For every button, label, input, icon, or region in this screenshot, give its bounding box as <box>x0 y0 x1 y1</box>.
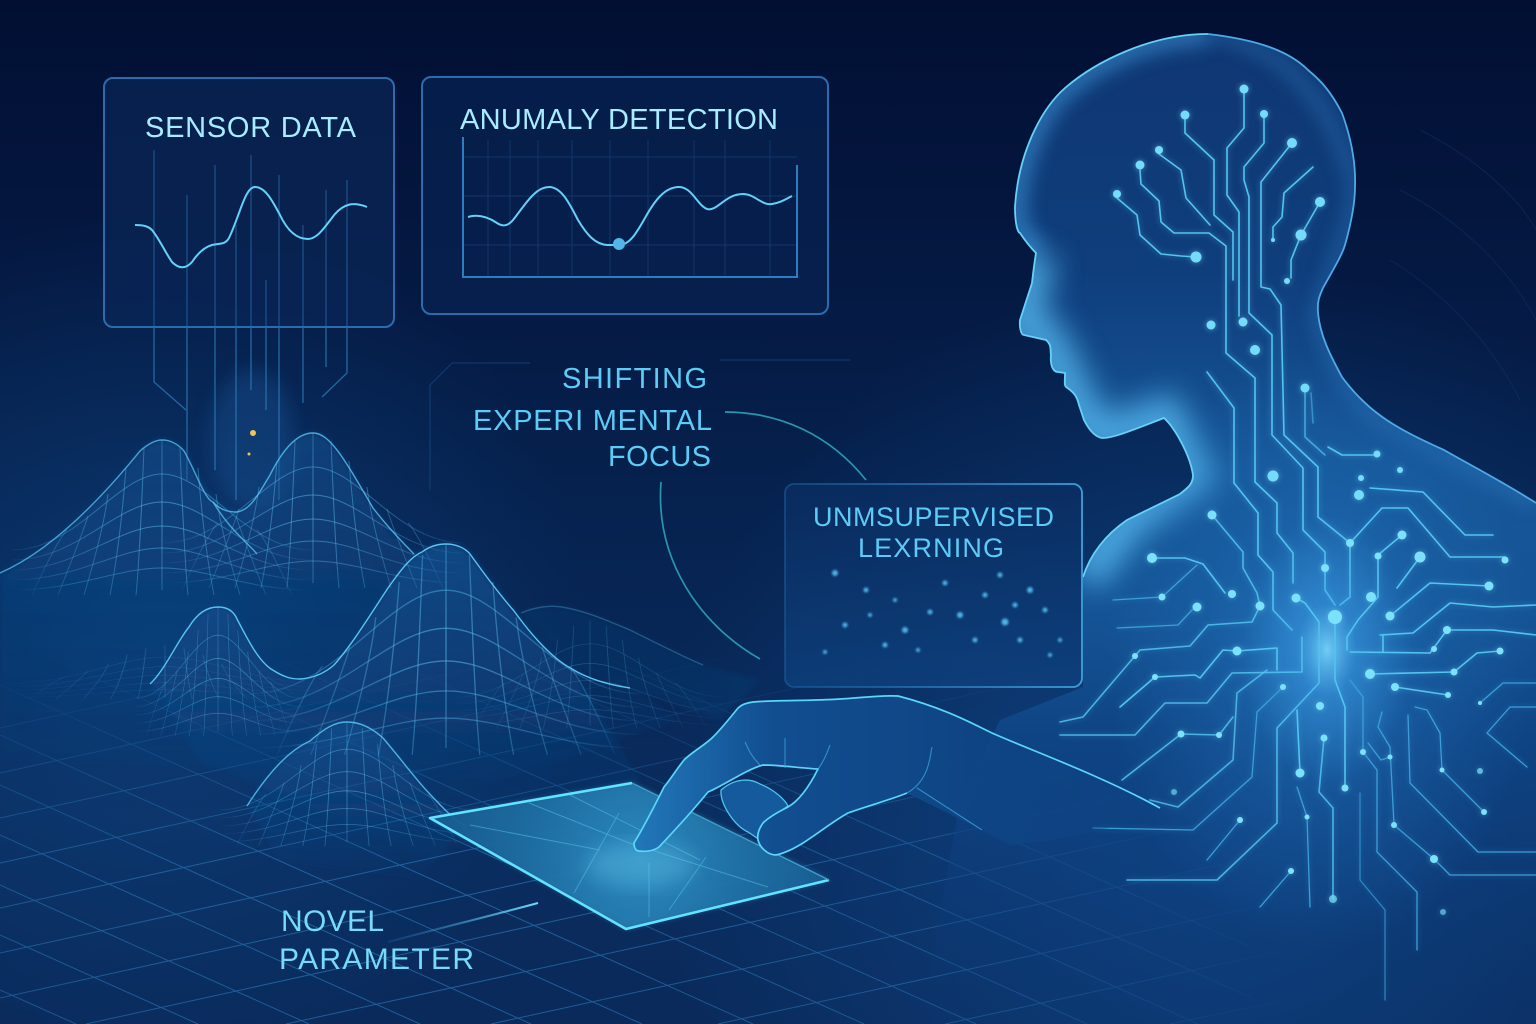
chart: sensor waveform <box>135 187 367 267</box>
circuit traces: brain and spine <box>1113 84 1403 630</box>
figure: human head and shoulders <box>946 33 1536 912</box>
faint bracket lines <box>430 360 850 490</box>
heading: sensor data: SENSOR DATA <box>145 112 357 144</box>
heading: unsupervised learning: UNMSUPERVISED <box>813 502 1054 532</box>
text: shifting experimental focus: EXPERI MENTAL <box>473 405 712 437</box>
core glow <box>1242 515 1412 785</box>
chest nodes <box>1132 510 1508 915</box>
brain nodes <box>1113 84 1403 500</box>
chart: anomaly waveform <box>468 187 792 245</box>
text: shifting experimental focus: SHIFTING <box>562 363 707 395</box>
terrain: wireframe landscape <box>0 432 1230 1024</box>
panel: anomaly detection <box>422 77 828 314</box>
text: shifting experimental focus: FOCUS <box>608 441 711 473</box>
chart frame <box>463 137 797 277</box>
text: shifting experimental focus <box>473 363 712 473</box>
panel: unsupervised learning <box>785 484 1082 687</box>
callout: novel parameter <box>279 903 538 976</box>
hill fills <box>0 433 760 880</box>
panel: sensor data <box>104 78 394 328</box>
hill mesh <box>8 433 725 846</box>
tablet: glowing panel <box>430 783 829 929</box>
middle finger <box>721 780 788 838</box>
circuit traces: chest <box>1060 488 1536 1000</box>
connector lines from sensor panel to terrain <box>154 328 347 510</box>
hill ridges <box>0 433 703 826</box>
heading: anomaly detection: ANUMALY DETECTION <box>460 104 778 136</box>
arrows: curved connectors <box>660 412 866 659</box>
scatter points <box>823 570 1062 657</box>
callout: novel parameter: NOVEL <box>281 905 384 938</box>
palm and pointing finger <box>634 696 1160 855</box>
callout: novel parameter: PARAMETER <box>279 943 474 976</box>
hand and arm pointing <box>634 696 1160 855</box>
ground grid <box>0 681 1230 1024</box>
amber particles <box>250 430 256 436</box>
anomaly point <box>613 238 625 250</box>
panel: unsupervised learning: LEXRNING <box>858 533 1004 563</box>
